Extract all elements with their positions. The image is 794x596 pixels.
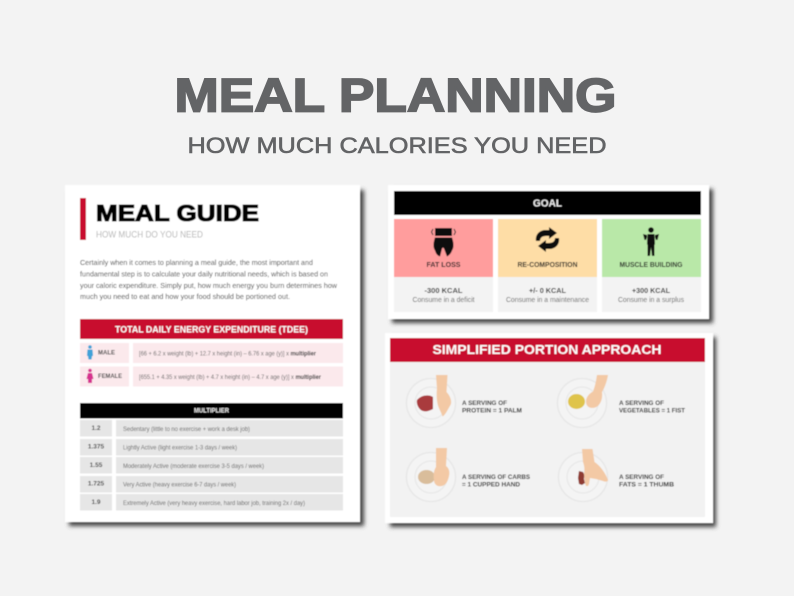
- female formula row: FEMALE: [98, 374, 122, 380]
- intro text: fundamental step is to calculate your daily nutritional needs, which is based on: [80, 270, 328, 278]
- portion: fats: [558, 449, 674, 502]
- column: re-composition: +/- 0 KCAL: [529, 288, 567, 295]
- goal header: GOAL: [533, 198, 562, 210]
- heading: meal guide: MEAL GUIDE: [96, 200, 259, 226]
- heading: meal guide: HOW MUCH DO YOU NEED: [96, 230, 203, 240]
- multiplier table: 1.55: [90, 462, 103, 469]
- intro text: Certainly when it comes to planning a meal guide, the most important and: [80, 258, 313, 267]
- multiplier table: [80, 420, 343, 510]
- multiplier table: 1.375: [88, 444, 105, 450]
- multiplier table: Extremely Active (very heavy exercise, hard labor job, training 2x / day): [123, 500, 305, 507]
- intro text: much you need to eat and how your food should be portioned out.: [80, 292, 290, 301]
- portion header: SIMPLIFIED PORTION APPROACH: [432, 342, 662, 357]
- column: muscle building: +300 KCAL: [632, 288, 671, 295]
- column: muscle building: Consume in a surplus: [618, 297, 684, 304]
- TDEE header: TOTAL DAILY ENERGY EXPENDITURE (TDEE): [115, 324, 308, 334]
- icon: cycle arrows: [536, 227, 559, 252]
- icon: male: [87, 345, 93, 360]
- panel: goal: [388, 185, 713, 323]
- panel: meal guide: [65, 185, 364, 526]
- icon: waist: [432, 228, 456, 256]
- portion: vegetables: VEGETABLES = 1 FIST: [619, 408, 686, 414]
- column: re-composition: [498, 219, 597, 312]
- portion: protein: A SERVING OF: [462, 400, 507, 407]
- portion: fats: FATS = 1 THUMB: [619, 482, 674, 488]
- multiplier header: MULTIPLIER: [194, 408, 229, 414]
- portion: protein: [406, 375, 522, 428]
- multiplier table: Very Active (heavy exercise 6-7 days / week): [123, 482, 236, 488]
- title: MEAL PLANNING: [174, 68, 616, 122]
- multiplier table: 1.2: [91, 425, 101, 432]
- portion: vegetables: [558, 375, 686, 428]
- column: fat loss: -300 KCAL: [424, 288, 463, 295]
- goal header: [394, 191, 701, 215]
- column: re-composition: Consume in a maintenance: [506, 297, 589, 304]
- icon: female: [86, 369, 94, 383]
- column: muscle building: [602, 219, 701, 312]
- multiplier table: Sedentary (little to no exercise + work a desk job): [123, 426, 250, 433]
- portion: carbs: [406, 448, 530, 502]
- portion: carbs: A SERVING OF CARBS: [462, 474, 530, 481]
- TDEE header: [80, 319, 343, 339]
- male formula row: MALE: [98, 350, 115, 356]
- female formula row: [80, 366, 343, 386]
- column: fat loss: Consume in a deficit: [412, 297, 475, 304]
- multiplier table: 1.725: [88, 480, 105, 488]
- portion: carbs: = 1 CUPPED HAND: [462, 482, 520, 488]
- multiplier table: Lightly Active (light exercise 1-3 days / week): [123, 444, 237, 452]
- portion: fats: A SERVING OF: [619, 474, 664, 481]
- heading: meal guide: [80, 198, 259, 240]
- male formula row: [66 + 6.2 x weight (lb) + 12.7 x height (in) – 6.76 x age (y)] x multiplier: [139, 350, 317, 358]
- subtitle: HOW MUCH CALORIES YOU NEED: [188, 133, 606, 158]
- panel: portion approach: [385, 333, 716, 527]
- multiplier table: Moderately Active (moderate exercise 3-5 days / week): [123, 463, 264, 470]
- portion: protein: PROTEIN = 1 PALM: [462, 408, 522, 414]
- intro text: your caloric expenditure. Simply put, how much energy you burn determines how: [80, 281, 337, 290]
- multiplier table: 1.9: [91, 499, 101, 506]
- icon: muscle figure: [643, 227, 659, 256]
- column: re-composition: RE-COMPOSITION: [518, 262, 578, 269]
- female formula row: [655.1 + 4.35 x weight (lb) + 4.7 x height (in) – 4.7 x age (y)] x multiplier: [139, 374, 322, 381]
- multiplier header: [80, 403, 343, 418]
- column: muscle building: MUSCLE BUILDING: [620, 262, 683, 269]
- column: fat loss: FAT LOSS: [426, 262, 461, 269]
- intro text: [80, 258, 337, 301]
- portion: vegetables: A SERVING OF: [619, 400, 664, 407]
- male formula row: [80, 343, 343, 363]
- portion header: [390, 338, 705, 362]
- column: fat loss: [394, 219, 493, 312]
